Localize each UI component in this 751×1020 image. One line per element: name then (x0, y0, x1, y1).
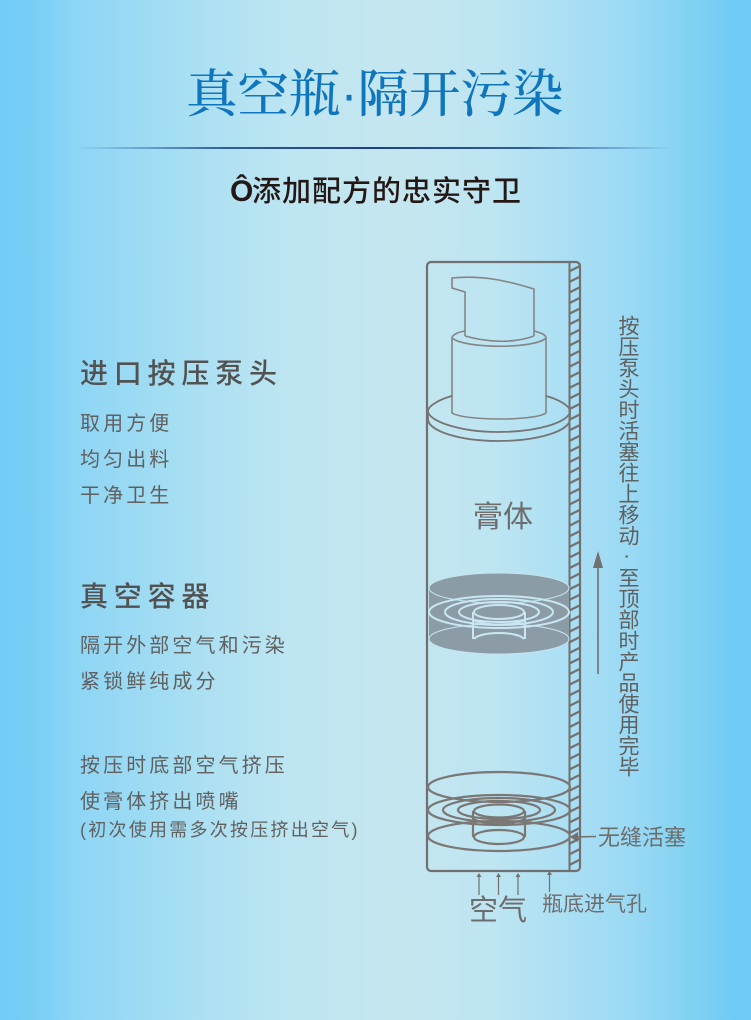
icon: pump head (428, 277, 570, 441)
title: 真空瓶 隔开污染 (186, 67, 564, 124)
feature list: pump (80, 413, 172, 507)
feature list: pump: 取用方便 (80, 413, 172, 435)
title: · (341, 65, 358, 123)
feature list: vacuum: 隔开外部空气和污染 (80, 635, 288, 657)
vertical caption: piston movement: · (616, 553, 639, 560)
heading: vacuum container: 真空容器 (80, 581, 215, 612)
note: first use: (初次使用需多次按压挤出空气) (80, 820, 360, 840)
feature list: vacuum (80, 635, 288, 693)
arrow: piston moves upward (593, 551, 603, 674)
leader line: seamless piston (570, 832, 596, 842)
bottle outline (427, 262, 580, 871)
explanation lines (80, 755, 288, 813)
label: cream body: 膏体 (473, 501, 533, 534)
vertical caption: piston movement: 按压泵头时活塞往上移动 至顶部时产品使用完毕 (616, 315, 639, 777)
icon: piston bottom position (428, 772, 570, 851)
explanation lines: 按压时底部空气挤压 (80, 755, 288, 777)
text block: vacuum container (80, 581, 288, 693)
label: bottom air hole: 瓶底进气孔 (542, 893, 647, 916)
feature list: pump: 干净卫生 (80, 485, 172, 507)
title divider (75, 147, 675, 149)
explanation lines: 使膏体挤出喷嘴 (80, 791, 242, 813)
text block: imported pump (80, 358, 283, 507)
subtitle: 添加配方的忠实守卫 (252, 176, 522, 208)
icon: piston mid, upper position (429, 573, 569, 654)
arrows: air intake (476, 871, 552, 895)
label: seamless piston: 无缝活塞 (598, 825, 686, 850)
text block: press explanation (80, 755, 360, 840)
label: air: 空气 (469, 895, 527, 927)
subtitle: Ô (230, 175, 253, 208)
feature list: vacuum: 紧锁鲜纯成分 (80, 671, 219, 693)
heading: imported pump: 进口按压泵头 (80, 358, 283, 389)
feature list: pump: 均匀出料 (80, 449, 172, 471)
